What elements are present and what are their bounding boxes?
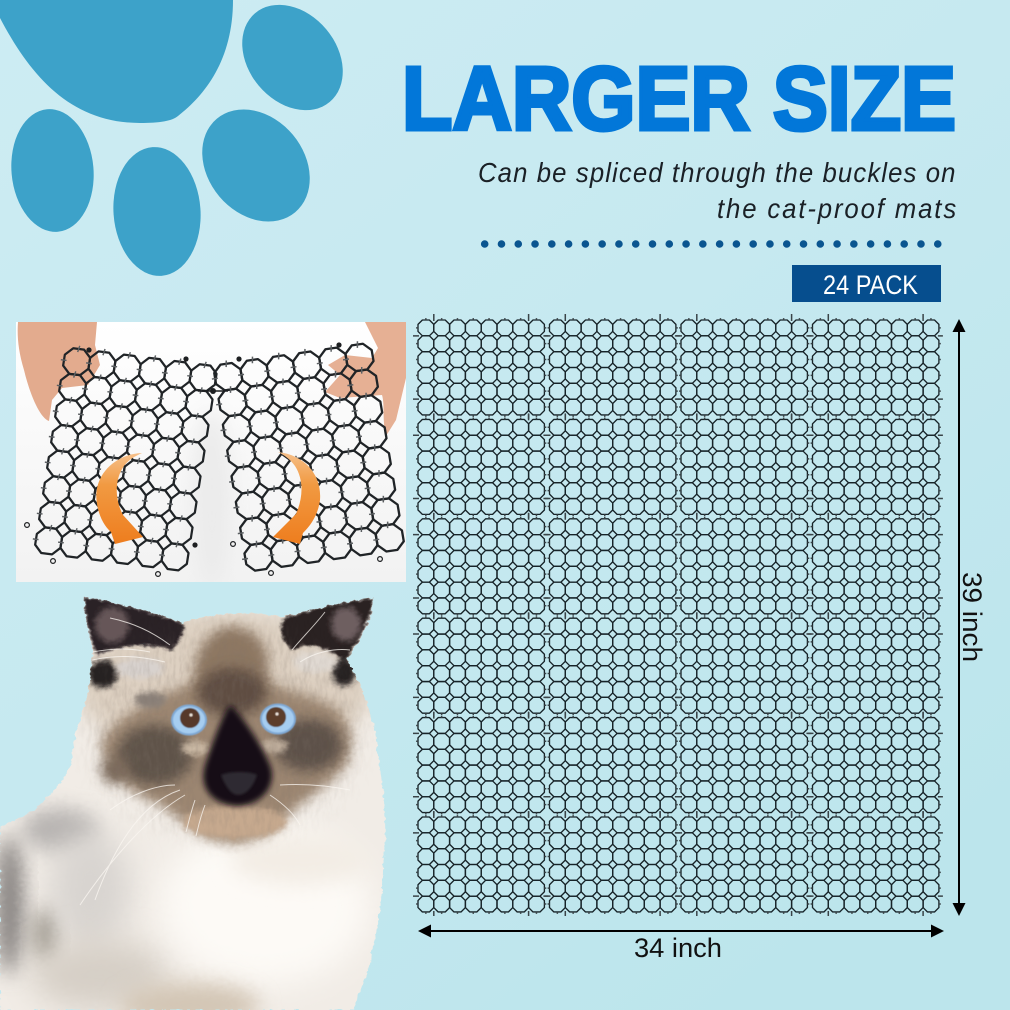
buckle connectors	[25, 342, 382, 576]
arrow: orange left	[96, 453, 143, 544]
dotted divider	[485, 240, 940, 248]
cat whiskers and fur	[80, 612, 350, 905]
icon: paw print	[0, 0, 363, 279]
title: LARGER SIZE	[402, 50, 956, 150]
cat nose patch	[203, 705, 272, 806]
mat: right piece	[209, 339, 405, 572]
badge: 24 pack	[792, 265, 941, 302]
subtitle	[478, 157, 956, 224]
subtitle: the cat-proof mats	[717, 193, 956, 224]
badge: 24 pack: 24 PACK	[823, 270, 918, 300]
cat body shading	[0, 610, 375, 1010]
cat face mask	[100, 626, 351, 845]
photo: splicing mats by hand	[16, 322, 406, 590]
fur texture	[90, 625, 360, 835]
hand: left	[18, 322, 100, 421]
mesh: 24 spliced cat-proof mats	[413, 314, 943, 916]
hand: right	[325, 322, 406, 436]
label: 39 inch: 39 inch	[957, 572, 987, 662]
cat ears	[85, 597, 373, 688]
label: 34 inch: 34 inch	[634, 933, 722, 963]
arrow: height dimension	[952, 319, 966, 916]
cat photo	[0, 597, 385, 1010]
arrow: orange right	[273, 452, 320, 544]
arrow: width dimension	[418, 924, 944, 938]
cat fur base	[0, 597, 385, 1010]
cat eyes	[171, 704, 296, 736]
mat: left piece	[31, 344, 218, 571]
subtitle: Can be spliced through the buckles on	[478, 157, 955, 188]
